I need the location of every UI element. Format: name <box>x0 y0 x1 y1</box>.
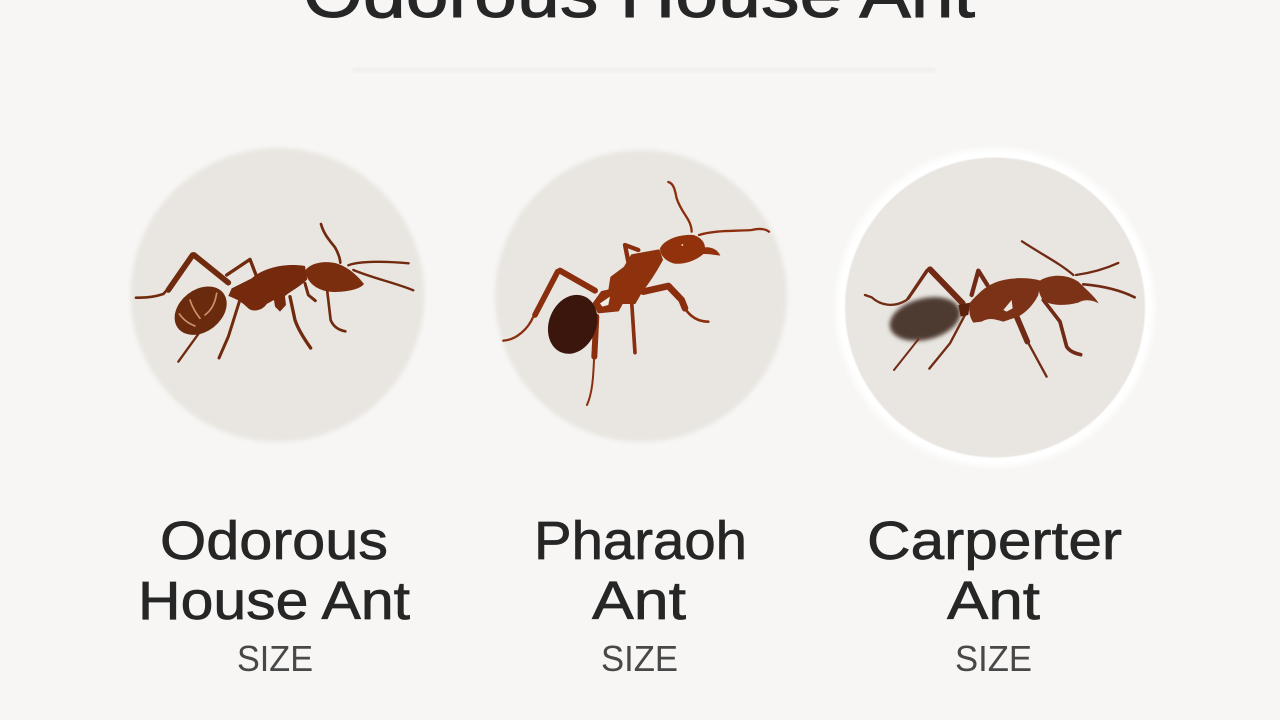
icon: circle backdrop 2 <box>495 150 787 442</box>
label: carpenter ant <box>867 511 1122 679</box>
label: pharaoh ant: Pharaoh <box>534 511 747 571</box>
label: carpenter ant: SIZE <box>955 638 1032 679</box>
panel: odorous house ant <box>130 148 424 679</box>
icon: carpenter ant <box>865 241 1135 377</box>
label: odorous house ant: House Ant <box>138 571 410 631</box>
label: pharaoh ant: SIZE <box>601 638 678 679</box>
icon: white ring glow <box>836 148 1154 466</box>
icon: circle backdrop 1 <box>130 148 424 442</box>
label: carpenter ant: Carperter <box>867 511 1122 571</box>
label: odorous house ant <box>138 511 410 679</box>
label: pharaoh ant <box>534 511 747 679</box>
label: odorous house ant: SIZE <box>237 638 313 679</box>
icon: circle backdrop 3 <box>845 158 1145 458</box>
panel: carpenter ant <box>836 148 1154 679</box>
icon: pharaoh ant <box>503 182 769 405</box>
label: carpenter ant: Ant <box>947 571 1040 631</box>
icon: odorous house ant <box>136 224 413 362</box>
label: odorous house ant: Odorous <box>160 511 388 571</box>
panel: pharaoh ant <box>495 150 787 679</box>
label: pharaoh ant: Ant <box>592 571 686 631</box>
